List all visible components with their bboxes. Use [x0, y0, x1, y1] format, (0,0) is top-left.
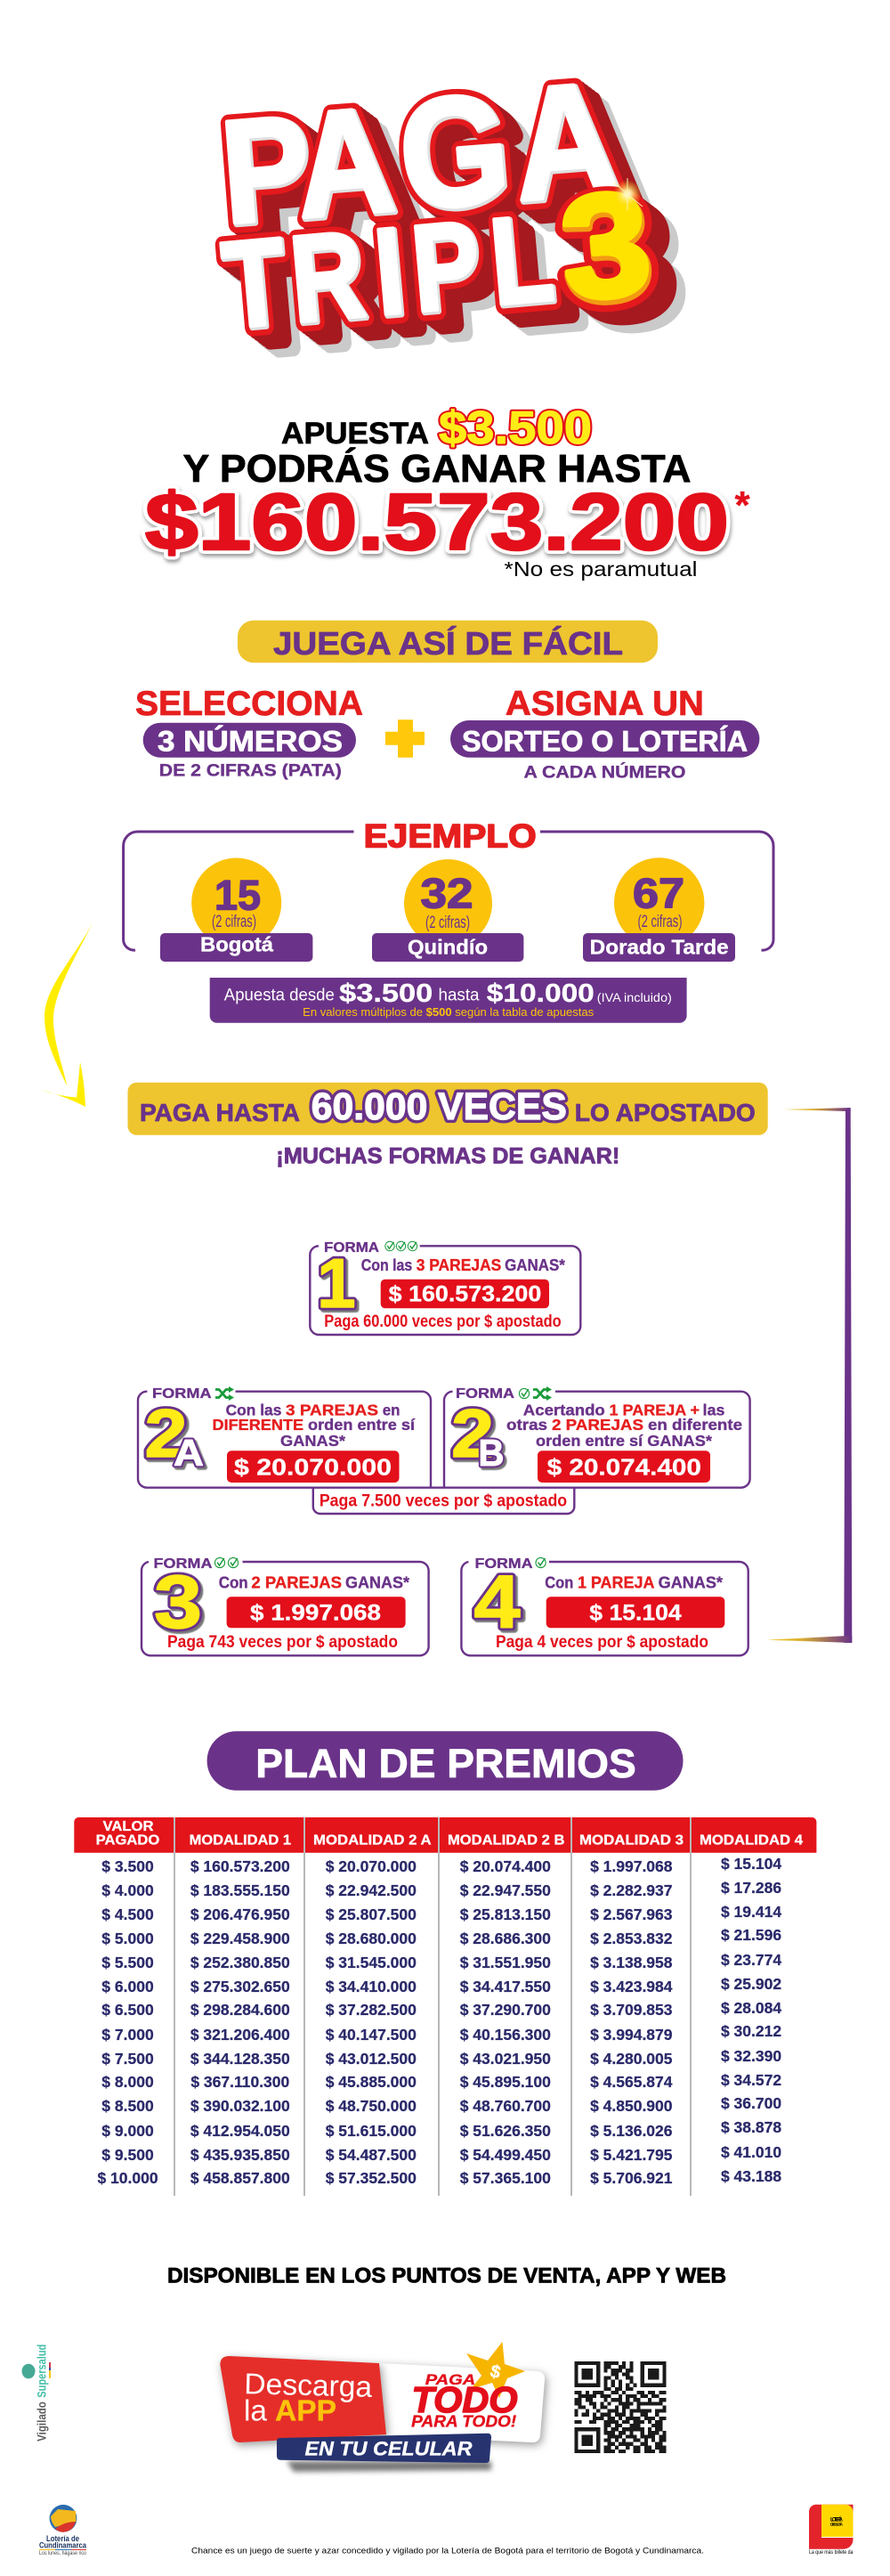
table rows: $ 34.417.550 [460, 1978, 551, 1995]
table header: PAGADO [96, 1832, 159, 1848]
table rows: $ 37.282.500 [326, 2001, 417, 2019]
table header [74, 1817, 816, 1853]
table rows: $ 183.555.150 [190, 1881, 290, 1899]
table rows: $ 7.000 [101, 2026, 154, 2044]
table rows: $ 22.942.500 [326, 1881, 417, 1899]
text: condition: Acertando [523, 1401, 605, 1418]
label: forma: FORMA [475, 1556, 533, 1572]
table rows: $ 41.010 [721, 2143, 781, 2161]
table rows: $ 344.128.350 [190, 2050, 290, 2068]
example: 15 Bogotá: (2 cifras) [212, 913, 256, 931]
logo digit: 3: 3 [556, 164, 658, 335]
logo word: TRIPL: TRIPL [219, 190, 560, 355]
table rows: $ 17.286 [721, 1879, 781, 1897]
text: condition: GANAS* [659, 1573, 723, 1591]
table rows: $ 3.423.984 [590, 1978, 673, 1995]
headline: apuesta y gana [145, 402, 750, 581]
example: 67 Dorado Tarde: 67 [633, 869, 684, 916]
table rows: $ 15.104 [721, 1855, 781, 1873]
text: supersalud: Supersalud [36, 2344, 49, 2398]
text: cundinamarca: Cundinamarca [39, 2541, 87, 2551]
table rows: $ 9.000 [101, 2122, 154, 2140]
text: condition [506, 1401, 742, 1450]
heading: plan de premios: PLAN DE PREMIOS [255, 1741, 636, 1786]
logo shape [809, 2505, 853, 2549]
table rows: $ 275.302.650 [190, 1978, 290, 1995]
block: selecciona [135, 685, 363, 781]
text: lotería de bogotá [830, 2516, 844, 2526]
table rows: $ 160.573.200 [190, 1857, 290, 1875]
table rows: $ 435.935.850 [190, 2146, 290, 2164]
table rows: $ 21.596 [721, 1926, 781, 1944]
table rows: $ 4.000 [101, 1881, 154, 1899]
digit 2A: 2 [144, 1396, 187, 1472]
callout: paga 7.500 veces: Paga 7.500 veces por $ apostado [320, 1491, 567, 1511]
table rows: $ 23.774 [721, 1951, 781, 1969]
logo text: paga todo para todo: PAGA [425, 2371, 475, 2388]
text: APUESTA: APUESTA [281, 417, 429, 451]
icons: three checks [385, 1241, 417, 1251]
text: condition: las [703, 1401, 725, 1418]
table rows: $ 9.500 [101, 2146, 154, 2164]
table rows: $ 1.997.068 [590, 1857, 673, 1875]
digit 1: 1 [317, 1244, 356, 1322]
label: forma: FORMA [152, 1386, 212, 1402]
table rows: $ 252.380.850 [190, 1954, 290, 1971]
tagline: La que más billete da [809, 2550, 854, 2556]
red panel [220, 2356, 386, 2442]
text: disclaimer: Chance es un juego de suerte y azar concedido y vigilado por la Lotería de Bogotá para el territorio de Bogotá y Cundinamarca. [191, 2547, 704, 2556]
text: condition: otras [506, 1416, 547, 1434]
text: Y podrás ganar hasta: Y PODRÁS GANAR HASTA [183, 446, 691, 491]
table rows: $ 3.994.879 [590, 2026, 673, 2044]
table rows: $ 57.352.500 [326, 2169, 417, 2187]
table rows: $ 30.212 [721, 2022, 781, 2040]
digit 2B: B [479, 1432, 504, 1474]
text: condition: 2 PAREJAS [552, 1416, 643, 1434]
logo word: PAGA: G [393, 61, 515, 243]
text: vigilado: Vigilado [36, 2401, 49, 2442]
table rows: $ 4.280.005 [590, 2050, 673, 2068]
table rows: $ 2.853.832 [590, 1930, 673, 1947]
logo text: paga todo para todo: TODO [411, 2379, 518, 2420]
box: rango de apuesta [210, 978, 687, 1023]
table rows: $ 45.895.100 [460, 2073, 551, 2091]
box: rango de apuesta: (IVA incluido) [597, 990, 672, 1004]
text: condition: Con [219, 1573, 248, 1591]
panel: forma 4 [461, 1556, 748, 1655]
icon: shuffle [215, 1386, 234, 1401]
table rows: $ 54.487.500 [326, 2146, 417, 2164]
digit 2A [144, 1396, 204, 1474]
text: condition: GANAS* [345, 1573, 409, 1591]
white inset [821, 2537, 853, 2538]
ribbon: en tu celular: EN TU CELULAR [304, 2438, 473, 2460]
white panel [379, 2363, 545, 2442]
example: 67 Dorado Tarde [583, 857, 735, 962]
table header: MODALIDAD 4 [700, 1832, 803, 1848]
table rows: $ 3.138.958 [590, 1954, 673, 1971]
table rows: $ 34.572 [721, 2071, 781, 2089]
table rows: $ 43.188 [721, 2167, 781, 2185]
logo word: PAGA: A [507, 48, 625, 235]
table rows: $ 4.500 [101, 1906, 154, 1923]
text: descarga la app [244, 2367, 373, 2426]
pill: sorteo o lotería: SORTEO O LOTERÍA [462, 725, 748, 757]
example: 67 Dorado Tarde: (2 cifras) [637, 913, 682, 931]
prize: $ 15.104 [589, 1600, 682, 1625]
price: $3.500: $3.500 [439, 402, 592, 454]
table rows: $ 321.206.400 [190, 2026, 290, 2044]
logo sparkle [613, 178, 643, 210]
text: condition: Con [545, 1573, 573, 1591]
example: 15 Bogotá: 15 [214, 872, 261, 919]
text: lotería de bogotá: LOTERÍA [830, 2516, 844, 2523]
logo word: PAGA: A [291, 76, 401, 251]
digit 2A: 2 [144, 1396, 187, 1472]
table rows: $ 48.760.700 [460, 2097, 551, 2115]
example: 32 Quindío [372, 859, 523, 962]
text: 60.000 veces: 60.000 VECES [312, 1085, 567, 1128]
table rows: $ 367.110.300 [190, 2073, 290, 2091]
text: de 2 cifras: DE 2 CIFRAS (PATA) [159, 762, 342, 781]
table rows: $ 5.500 [101, 1954, 154, 1971]
prize: $ 1.997.068 [250, 1600, 381, 1625]
logo word: PAGA: G [395, 62, 517, 245]
panel: forma 2B [444, 1386, 750, 1488]
example: 32 Quindío: Quindío [408, 936, 488, 959]
table: plan de premios [74, 1817, 816, 2196]
label: forma: FORMA [456, 1386, 515, 1402]
heading: selecciona: SELECCIONA [135, 685, 363, 723]
table rows: $ 8.500 [101, 2097, 154, 2115]
logo word: PAGA: A [291, 76, 401, 251]
table rows: $ 43.012.500 [326, 2050, 417, 2068]
label: forma: FORMA [324, 1240, 379, 1255]
heading: plan de premios [207, 1731, 684, 1791]
pill: 3 números: 3 NÚMEROS [158, 725, 343, 757]
panel: juega así de fácil [238, 621, 658, 662]
prize [546, 1597, 724, 1628]
block: asigna un [450, 685, 759, 782]
text: descarga la app: APP [275, 2393, 336, 2426]
icon: flag stripe [49, 2362, 51, 2378]
logo word: PAGA: A [509, 50, 627, 236]
icon: emblem [21, 2364, 36, 2378]
text: condition: en [383, 1401, 400, 1418]
example: 32 Quindío: (2 cifras) [425, 914, 470, 932]
banner: descarga la app [220, 2342, 545, 2472]
heading: asigna un: ASIGNA UN [506, 685, 704, 723]
frame [124, 832, 773, 950]
text: condition: Con las [226, 1401, 282, 1418]
digit 4: 4 [473, 1560, 521, 1644]
text: condition: GANAS* [505, 1256, 565, 1274]
logo text: paga todo para todo: PARA TODO! [411, 2413, 516, 2431]
prize amount: $160.573.200 [145, 478, 729, 567]
table rows: $ 25.807.500 [326, 1906, 417, 1923]
example: 67 Dorado Tarde: Dorado Tarde [590, 936, 729, 959]
table rows: $ 20.070.000 [326, 1857, 417, 1875]
table rows: $ 32.390 [721, 2047, 781, 2065]
prize [227, 1451, 399, 1483]
table rows: $ 2.282.937 [590, 1881, 673, 1899]
digit 2B: 2 [451, 1396, 494, 1472]
text: condition [219, 1573, 409, 1591]
prize: $ 160.573.200 [389, 1282, 541, 1307]
logo digit: 3: 3 [554, 161, 657, 331]
icon: plus [385, 719, 425, 758]
text: condition: 3 PAREJAS [286, 1401, 378, 1418]
table rows: $ 19.414 [721, 1903, 781, 1921]
logo: lotería de cundinamarca [39, 2505, 87, 2556]
arrow: yellow curved [41, 923, 93, 1107]
text: lotería de: Lotería de [46, 2534, 79, 2544]
text: disponible: DISPONIBLE EN LOS PUNTOS DE VENTA, APP Y WEB [167, 2263, 726, 2288]
example: 15 Bogotá [160, 858, 312, 962]
digit 2B [451, 1396, 504, 1474]
table header: MODALIDAD 2 B [448, 1832, 564, 1848]
ribbon: en tu celular [277, 2434, 491, 2463]
table rows: $ 20.074.400 [460, 1857, 551, 1875]
label: forma: FORMA [153, 1556, 213, 1572]
table rows: $ 25.813.150 [460, 1906, 551, 1923]
tricolor line [39, 2549, 86, 2550]
table rows: $ 37.290.700 [460, 2001, 551, 2019]
text: condition: 2 PAREJAS [251, 1573, 342, 1591]
digit 1: 1 [317, 1244, 356, 1322]
logo word: PAGA [214, 48, 627, 259]
text: condition: orden entre sí GANAS* [536, 1432, 712, 1450]
prize [538, 1451, 710, 1483]
logo word: TRIPL: TRIPL [217, 189, 558, 354]
logo word: PAGA: G [395, 62, 517, 245]
logo digit: 3: 3 [556, 164, 658, 335]
table rows: $ 48.750.000 [326, 2097, 417, 2115]
asterisk: * [734, 484, 750, 527]
tagline: Los lunes, hágase rico [39, 2551, 87, 2556]
table rows: $ 7.500 [101, 2050, 154, 2068]
table rows: $ 5.000 [101, 1930, 154, 1947]
logo word: PAGA: P [215, 85, 316, 255]
prize amount: $160.573.200 [145, 478, 729, 567]
table rows: $ 51.626.350 [460, 2122, 551, 2140]
logo word: PAGA: P [217, 86, 318, 256]
box: rango de apuesta: hasta [438, 986, 480, 1004]
table rows: $ 5.706.921 [590, 2169, 673, 2187]
logo: lotería de bogotá [809, 2505, 854, 2556]
heading text: JUEGA ASÍ DE FÁCIL [273, 625, 623, 662]
text: condition: 1 PAREJA + [610, 1401, 700, 1418]
digit 2B: B [479, 1432, 504, 1474]
text: condition: GANAS* [280, 1432, 345, 1450]
table header: VALOR [103, 1819, 154, 1834]
icon: emblem [50, 2505, 77, 2532]
table rows: $ 4.850.900 [590, 2097, 673, 2115]
icons: check and shuffle [519, 1386, 552, 1401]
table rows: $ 25.902 [721, 1975, 781, 1993]
table rows: $ 8.000 [101, 2073, 154, 2091]
text: condition: 1 PAREJA [578, 1573, 654, 1591]
table rows: $ 229.458.900 [190, 1930, 290, 1947]
table rows: $ 6.000 [101, 1978, 154, 1995]
table rows: $ 390.032.100 [190, 2097, 290, 2115]
table rows: $ 6.500 [101, 2001, 154, 2019]
digit 3: 3 [154, 1560, 202, 1644]
table rows: $ 51.615.000 [326, 2122, 417, 2140]
heading: ejemplo: EJEMPLO [364, 818, 537, 855]
column separators [174, 1817, 692, 2196]
logo: Paga Triple 3 [214, 48, 658, 356]
table header: MODALIDAD 2 A [313, 1832, 432, 1848]
table rows: $ 28.686.300 [460, 1930, 551, 1947]
note: no es paramutual: *No es paramutual [504, 557, 698, 581]
panel: forma 3 [142, 1556, 429, 1655]
table rows [97, 1855, 781, 2187]
prize [227, 1597, 406, 1628]
panel: forma 2A [138, 1386, 431, 1488]
text: paga veces: Paga 4 veces por $ apostado [496, 1633, 708, 1652]
text: descarga la app: Descarga [244, 2367, 373, 2403]
heading: muchas formas de ganar: ¡MUCHAS FORMAS DE GANAR! [276, 1144, 619, 1169]
example: 32 Quindío: 32 [420, 869, 473, 916]
table rows: $ 22.947.550 [460, 1881, 551, 1899]
prize: $ 20.074.400 [547, 1454, 701, 1481]
digit 2B: 2 [451, 1396, 494, 1472]
table rows: $ 45.885.000 [326, 2073, 417, 2091]
table rows: $ 412.954.050 [190, 2122, 290, 2140]
logo word: PAGA: A [509, 50, 627, 236]
text: condition: 3 PAREJAS [417, 1256, 501, 1274]
text: lo apostado: LO APOSTADO [575, 1099, 756, 1126]
table rows: $ 54.499.450 [460, 2146, 551, 2164]
example: 15 Bogotá: Bogotá [200, 932, 273, 955]
text: paga hasta: PAGA HASTA [140, 1099, 300, 1126]
table header: MODALIDAD 3 [579, 1832, 684, 1848]
text: descarga la app: la [244, 2393, 268, 2426]
box: rango de apuesta: $3.500 [339, 979, 433, 1008]
table rows: $ 36.700 [721, 2094, 781, 2112]
text: condition [213, 1401, 416, 1450]
icon: check [536, 1557, 546, 1568]
panel: ejemplo [124, 818, 773, 1023]
box: rango de apuesta: En valores múltiplos de $500 según la tabla de apuestas [303, 1006, 594, 1019]
table rows: $ 31.551.950 [460, 1954, 551, 1971]
logo: vigilado supersalud [21, 2344, 51, 2442]
panel: forma 1 [310, 1240, 580, 1335]
box: rango de apuesta: Apuesta desde [224, 986, 335, 1004]
text: condition: Con las [361, 1256, 412, 1274]
digit 2A: A [174, 1432, 204, 1474]
text: paga veces: Paga 60.000 veces por $ apostado [324, 1312, 562, 1331]
table rows: $ 2.567.963 [590, 1906, 673, 1923]
price: $3.500: $3.500 [439, 402, 592, 454]
icons: two checks [214, 1557, 239, 1568]
table rows: $ 3.709.853 [590, 2001, 673, 2019]
table rows: $ 5.421.795 [590, 2146, 673, 2164]
text: condition [361, 1256, 565, 1274]
box: rango de apuesta: $10.000 [487, 979, 595, 1008]
icon: star [466, 2342, 525, 2398]
table rows: $ 43.021.950 [460, 2050, 551, 2068]
table rows: $ 40.147.500 [326, 2026, 417, 2044]
digit 4: 4 [473, 1560, 521, 1644]
table header: MODALIDAD 1 [190, 1832, 291, 1848]
logo word: PAGA: A [289, 75, 400, 249]
digit 3: 3 [154, 1560, 202, 1644]
yellow square [821, 2505, 853, 2537]
table rows: $ 31.545.000 [326, 1954, 417, 1971]
text: condition: orden entre sí [308, 1416, 416, 1434]
text: condition [545, 1573, 723, 1591]
QR code [575, 2361, 666, 2453]
table rows: $ 38.878 [721, 2118, 781, 2136]
text: condition: en diferente [648, 1416, 742, 1434]
logo word: PAGA: P [217, 86, 318, 256]
bracket: gradient connector [767, 1108, 852, 1643]
table rows: $ 57.365.100 [460, 2169, 551, 2187]
text: condition: DIFERENTE [213, 1416, 303, 1434]
logo word: TRIPL: TRIPL [219, 190, 560, 355]
table rows: $ 34.410.000 [326, 1978, 417, 1995]
text: a cada número: A CADA NÚMERO [523, 762, 685, 782]
table rows: $ 4.565.874 [590, 2073, 673, 2091]
table rows: $ 10.000 [97, 2169, 158, 2187]
table rows: $ 40.156.300 [460, 2026, 551, 2044]
prize: $ 20.070.000 [234, 1454, 392, 1481]
table rows: $ 28.680.000 [326, 1930, 417, 1947]
digit 2A: A [174, 1432, 204, 1474]
text: dollar in star: $ [488, 2361, 503, 2383]
text: paga veces: Paga 743 veces por $ apostado [167, 1633, 398, 1652]
table rows: $ 28.084 [721, 1999, 781, 2017]
banner: paga hasta 60.000 veces [128, 1083, 768, 1135]
text: lotería de bogotá: DE BOGOTÁ [830, 2521, 844, 2526]
table rows: $ 5.136.026 [590, 2122, 673, 2140]
ribbon shadow [287, 2461, 491, 2472]
logo text: paga todo para todo [411, 2371, 518, 2431]
table rows: $ 3.500 [101, 1857, 154, 1875]
callout: paga 7.500 veces [313, 1488, 574, 1514]
table rows: $ 458.857.800 [190, 2169, 290, 2187]
table rows: $ 206.476.950 [190, 1906, 290, 1923]
table rows: $ 298.284.600 [190, 2001, 290, 2019]
text: 60.000 veces: 60.000 VECES [312, 1085, 567, 1128]
